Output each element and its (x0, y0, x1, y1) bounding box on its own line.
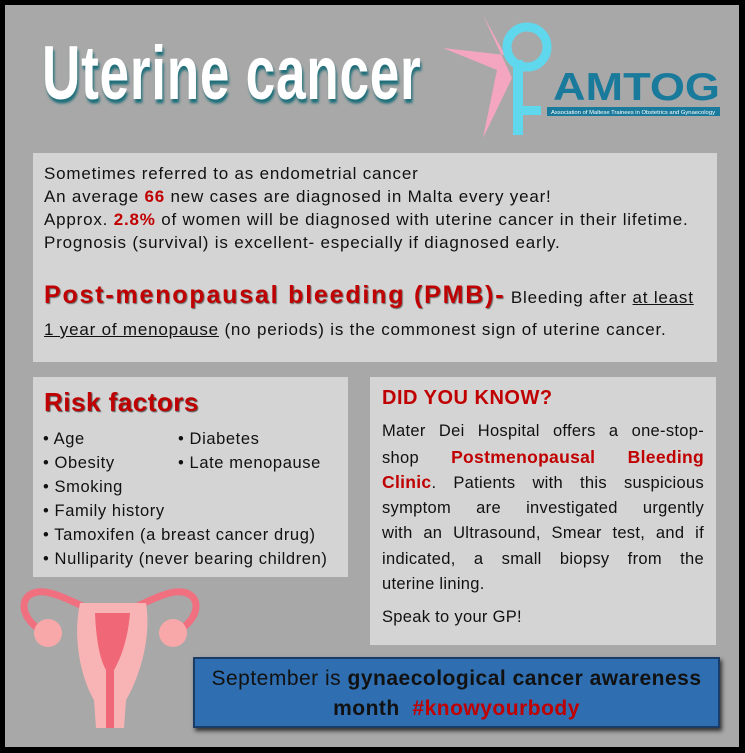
dyk text: Clinic. Patients with this suspicious (382, 472, 704, 492)
icon: uterus (20, 588, 200, 728)
dyk text: indicated, a small biopsy from the (382, 550, 704, 568)
risk list: • Obesity (43, 454, 115, 472)
risk heading: Risk factors (44, 387, 199, 417)
dyk text: with an Ultrasound, Smear test, and if (382, 524, 704, 542)
banner: awareness month: September is gynaecological cancer awareness (211, 667, 702, 690)
dyk text: shop Postmenopausal Bleeding (382, 446, 704, 466)
intro text: Approx. 2.8% of women will be diagnosed with uterine cancer in their lifetime. (44, 210, 688, 229)
risk list: • Smoking (43, 478, 123, 496)
banner: awareness month: month #knowyourbody (333, 697, 580, 720)
risk list: • Age (43, 430, 85, 448)
risk list: • Nulliparity (never bearing children) (43, 550, 327, 568)
panel: did you know (370, 377, 716, 645)
dyk heading: DID YOU KNOW? (382, 387, 553, 409)
intro text: Sometimes referred to as endometrial cancer (44, 164, 419, 183)
dyk text: symptom are investigated urgently (382, 498, 704, 516)
logo: PAMTOG: Association of Maltese Trainees in Obstetrics and Gynaecology (551, 110, 715, 116)
dyk text: Mater Dei Hospital offers a one-stop- (382, 422, 704, 440)
PMB heading and text: 1 year of menopause (no periods) is the commonest sign of uterine cancer. (44, 320, 667, 339)
panel: risk factors (33, 377, 348, 577)
dyk text: Speak to your GP! (382, 608, 522, 626)
intro text: Prognosis (survival) is excellent- especially if diagnosed early. (44, 233, 561, 252)
dyk text (382, 422, 704, 626)
PMB heading and text (44, 281, 694, 339)
logo: PAMTOG: AMTOG (553, 66, 720, 109)
logo: PAMTOG (443, 16, 720, 138)
panel: intro (33, 153, 717, 362)
intro text (44, 164, 688, 252)
dyk text: uterine lining. (382, 575, 485, 593)
title: Uterine cancer (42, 31, 421, 116)
risk list (43, 430, 327, 568)
panel: risk factors: • Diabetes (178, 430, 259, 448)
risk list: • Tamoxifen (a breast cancer drug) (43, 526, 316, 544)
PMB heading and text: Post-menopausal bleeding (PMB)- Bleeding after at least (44, 281, 694, 309)
intro text: An average 66 new cases are diagnosed in Malta every year! (44, 187, 552, 206)
panel: risk factors: • Late menopause (178, 454, 321, 472)
risk list: • Family history (43, 502, 165, 520)
banner: awareness month (193, 657, 720, 728)
